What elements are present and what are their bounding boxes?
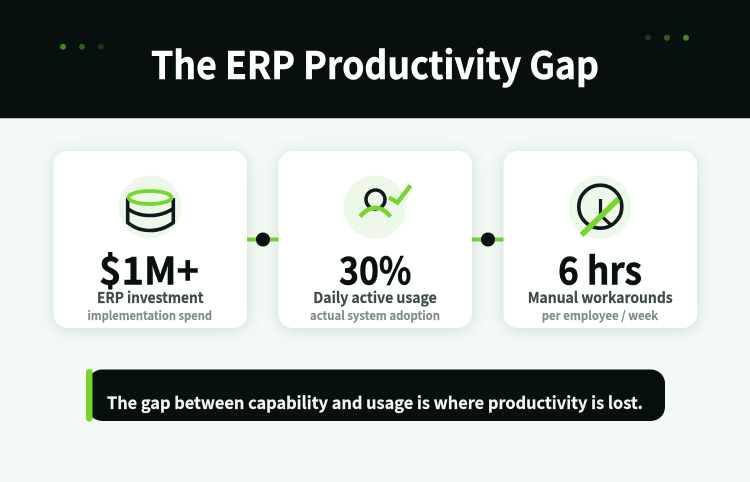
icon: clock with slash [568, 176, 632, 238]
connector 2 [470, 232, 505, 246]
stat value: $1M+ [99, 240, 199, 296]
stat label: Daily active usage [313, 287, 437, 308]
panel: manual workarounds [504, 151, 697, 328]
panel: ERP investment [54, 151, 247, 328]
title: The ERP Productivity Gap [151, 35, 599, 90]
stat value: 6 hrs [558, 240, 642, 296]
icon: database [118, 176, 182, 238]
callout accent bar [86, 369, 92, 422]
decorative dots left [60, 44, 104, 50]
stat label: Manual workarounds [528, 287, 673, 308]
stat label: ERP investment [97, 287, 204, 308]
stat note: actual system adoption [310, 307, 440, 324]
header band [0, 0, 750, 119]
stat value: 30% [339, 240, 412, 296]
stat note: per employee / week [542, 307, 659, 324]
connector 1 [245, 232, 280, 246]
stat note: implementation spend [88, 307, 212, 324]
icon: user check [344, 176, 410, 238]
callout [86, 369, 665, 422]
decorative dots right [645, 35, 689, 41]
callout text: The gap between capability and usage is where productivity is lost. [107, 389, 643, 414]
panel: daily active usage [278, 151, 472, 328]
